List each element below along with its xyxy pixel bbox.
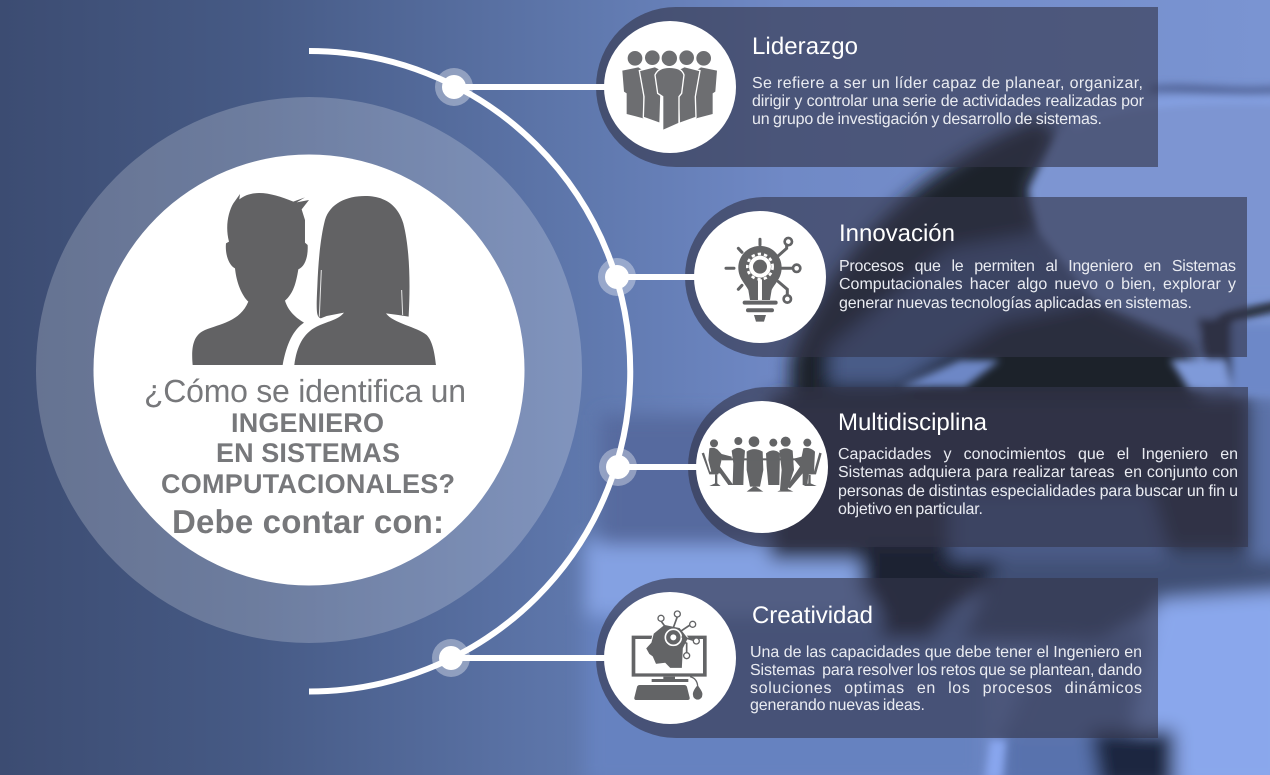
icon: team meeting bbox=[702, 436, 822, 492]
central question text: INGENIERO bbox=[231, 408, 384, 438]
central question text: COMPUTACIONALES? bbox=[161, 469, 455, 499]
icon: head with circuits at a computer bbox=[632, 611, 707, 700]
description: Computacionales hacer algo nuevo o bien, explorar y bbox=[839, 276, 1236, 293]
description: Una de las capacidades que debe tener el Ingeniero en bbox=[750, 644, 1142, 661]
central question text: Debe contar con: bbox=[172, 503, 444, 540]
description: Sistemas para resolver los retos que se plantean, dando bbox=[750, 662, 1142, 679]
panel: Liderazgo bbox=[435, 7, 1158, 167]
description: Procesos que le permiten al Ingeniero en Sistemas bbox=[839, 258, 1236, 275]
heading: Multidisciplina bbox=[838, 409, 988, 436]
description: Sistemas adquiera para realizar tareas en conjunto con bbox=[838, 464, 1238, 481]
panel: Innovación bbox=[598, 197, 1247, 357]
description: Se refiere a ser un líder capaz de planear, organizar, bbox=[752, 75, 1143, 92]
icon: man and woman silhouettes bbox=[192, 193, 436, 365]
central arc bbox=[309, 51, 630, 692]
central question text: EN SISTEMAS bbox=[216, 438, 400, 468]
inner white circle bbox=[94, 154, 524, 586]
description: generando nuevas ideas. bbox=[750, 697, 925, 714]
description: soluciones optimas en los procesos dinámicos bbox=[750, 680, 1142, 697]
description: personas de distintas especialidades para buscar un fin u bbox=[838, 483, 1238, 500]
description: Capacidades y conocimientos que el Ingeniero en bbox=[838, 446, 1238, 463]
heading: Liderazgo bbox=[752, 33, 858, 60]
outer translucent circle bbox=[36, 97, 582, 643]
connector bbox=[451, 655, 606, 661]
description bbox=[839, 258, 1236, 312]
connector bbox=[617, 274, 696, 280]
central question text: ¿Cómo se identifica un bbox=[144, 373, 466, 409]
panel: Creatividad bbox=[432, 578, 1158, 738]
description bbox=[838, 446, 1238, 518]
panel: Multidisciplina bbox=[599, 387, 1248, 547]
central question text bbox=[144, 373, 466, 540]
icon: light bulb with gear and circuits bbox=[726, 238, 800, 322]
description: generar nuevas tecnologías aplicadas en sistemas. bbox=[839, 295, 1192, 312]
description: un grupo de investigación y desarrollo de sistemas. bbox=[752, 111, 1102, 128]
heading: Innovación bbox=[839, 220, 955, 247]
heading: Creatividad bbox=[752, 602, 873, 629]
connector bbox=[618, 464, 700, 470]
connector bbox=[454, 84, 606, 90]
description bbox=[752, 75, 1145, 128]
description bbox=[750, 644, 1142, 714]
description: dirigir y controlar una serie de actividades realizadas por bbox=[752, 93, 1145, 110]
icon: group of people bbox=[622, 50, 717, 131]
description: objetivo en particular. bbox=[838, 501, 983, 518]
